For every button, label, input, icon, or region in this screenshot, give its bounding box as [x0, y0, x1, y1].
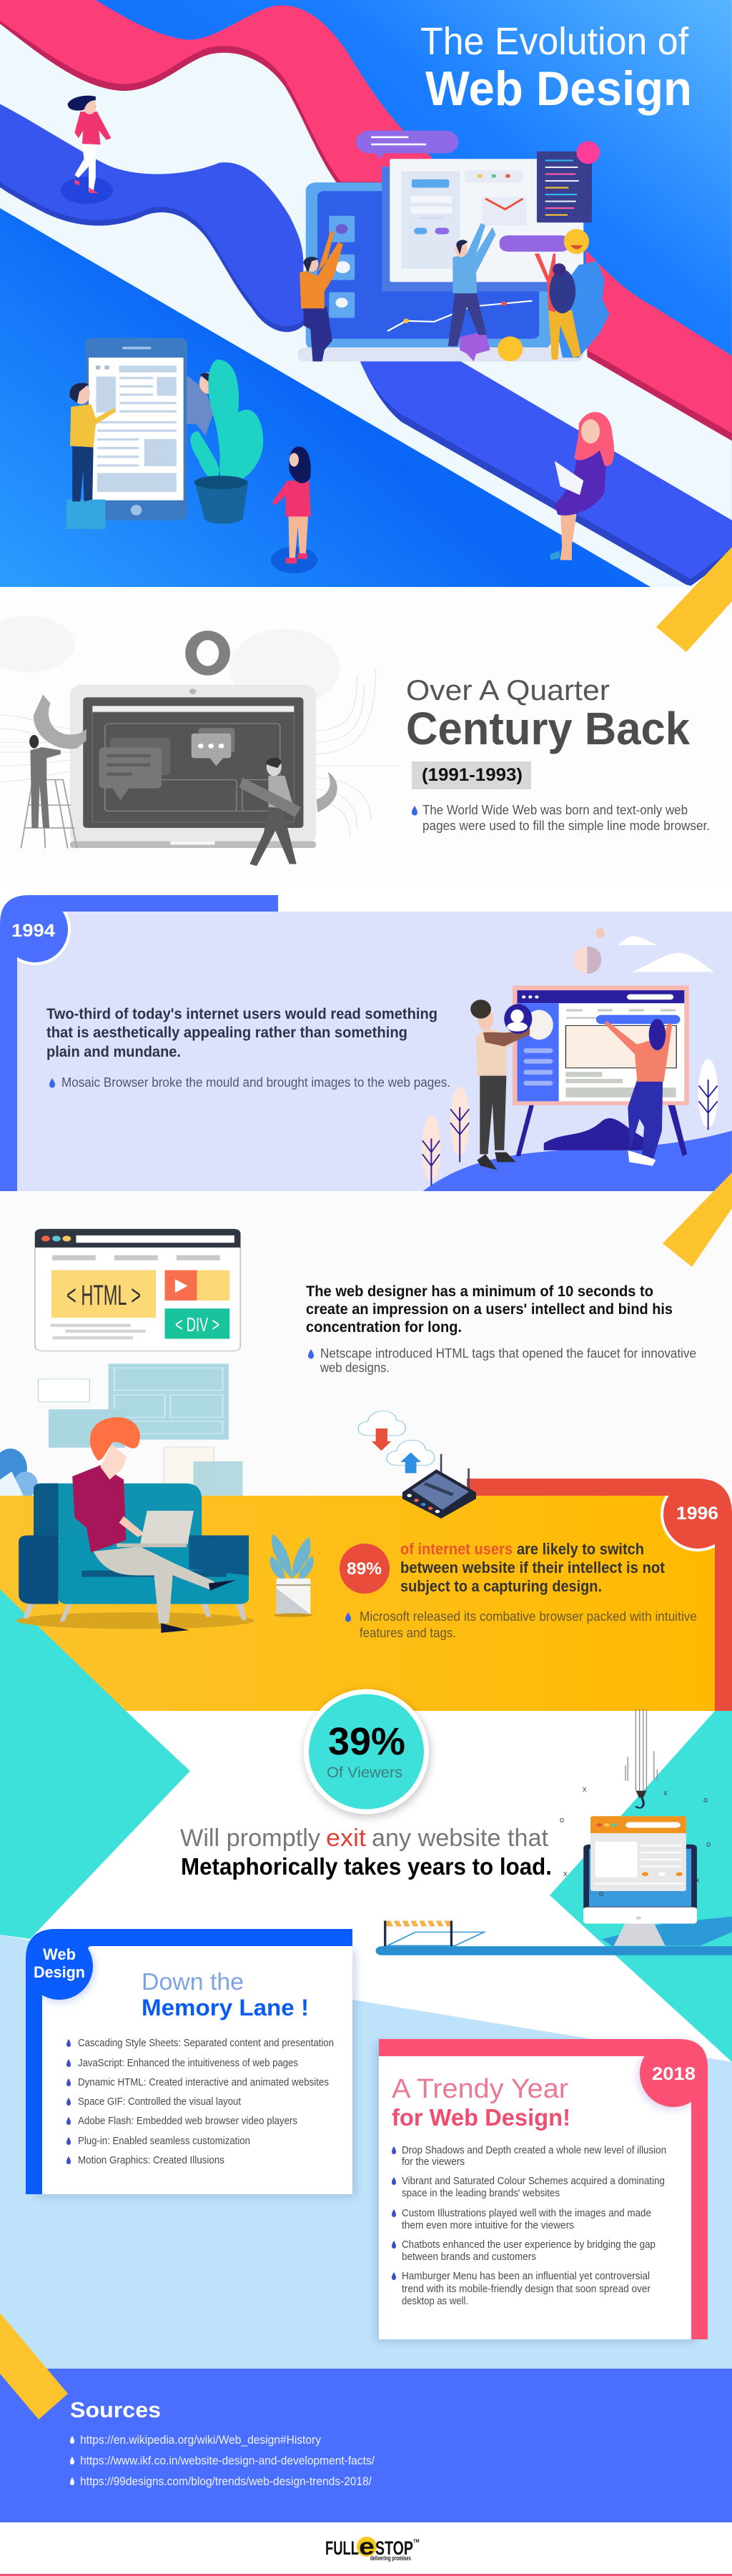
scattered x and o marks: o — [703, 1796, 708, 1805]
text block: html web designer: < DIV > — [175, 1313, 219, 1336]
message: Metaphorically takes years to load. — [181, 1853, 552, 1880]
badge — [26, 1929, 352, 2194]
man — [72, 1417, 236, 1633]
panel: 1996 — [0, 1417, 732, 1712]
html browser and wireframes illustration — [0, 1229, 435, 1497]
statistic badge: 89% — [347, 1559, 382, 1579]
list: Dynamic HTML: Created interactive and animated websites — [78, 2076, 329, 2088]
text block: html web designer: web designs. — [320, 1361, 390, 1375]
badge — [379, 2039, 708, 2339]
list: them even more intuitive for the viewers — [402, 2219, 574, 2231]
trees — [0, 1449, 38, 1497]
text block: features and tags. — [360, 1626, 456, 1640]
heading: Sources — [70, 2397, 161, 2422]
walking woman — [61, 96, 113, 204]
text block: Microsoft released its combative browser packed with intuitive — [360, 1609, 697, 1624]
statistic badge — [340, 1544, 390, 1594]
scattered x and o marks: x — [696, 1876, 700, 1885]
laptop dashboard — [298, 131, 609, 361]
list — [392, 2144, 666, 2307]
left teal shape — [0, 1711, 190, 1939]
plant — [190, 360, 263, 524]
text block: plain and mundane. — [46, 1044, 181, 1060]
year badge: 1996 — [676, 1504, 718, 1524]
date badge — [412, 761, 531, 789]
potted plant — [270, 1534, 314, 1617]
heading: Down the — [142, 1968, 244, 1995]
text block: Two-third of today's internet users would read something — [46, 1006, 437, 1022]
shelf and hurdle — [376, 1921, 732, 1955]
right teal shape — [550, 1711, 732, 2062]
scattered x and o marks — [560, 1785, 711, 1898]
text block: html web designer — [66, 1280, 696, 1375]
clouds and sphere — [573, 928, 714, 974]
list: Drop Shadows and Depth created a whole new level of illusion — [402, 2144, 666, 2156]
links: https://99designs.com/blog/trends/web-design-trends-2018/ — [80, 2474, 372, 2488]
browser board illustration — [422, 928, 732, 1191]
footer logo — [325, 2533, 420, 2562]
list: Vibrant and Saturated Colour Schemes acquired a dominating — [402, 2175, 665, 2187]
scattered x and o marks: o — [560, 1816, 564, 1825]
text block — [46, 1006, 450, 1090]
list: trend with its mobile-friendly design that soon spread over — [402, 2283, 651, 2295]
footer logo: delivering promises — [370, 2555, 411, 2562]
title: Web Design — [425, 61, 692, 116]
seated woman — [550, 412, 614, 560]
cloud upload download — [358, 1411, 435, 1474]
links: https://en.wikipedia.org/wiki/Web_design#History — [80, 2433, 321, 2447]
footer logo: e — [359, 2533, 375, 2560]
message: Will promptly — [180, 1825, 320, 1852]
title: The Evolution of — [420, 20, 689, 63]
links — [70, 2433, 375, 2488]
text block: between website if their intellect is not — [400, 1559, 666, 1576]
message: exit — [326, 1825, 367, 1852]
text block: html web designer: < HTML > — [66, 1280, 141, 1311]
text block: html web designer: Netscape introduced HTML tags that opened the faucet for innovative — [320, 1346, 696, 1361]
links: https://www.ikf.co.in/website-design-and-development-facts/ — [80, 2454, 375, 2467]
man with avatar — [470, 1000, 532, 1170]
badge: 2018 — [652, 2064, 696, 2084]
text block: of internet users — [400, 1540, 513, 1558]
text block: that is aesthetically appealing rather than something — [46, 1025, 407, 1041]
wifi router — [402, 1454, 476, 1519]
list: for the viewers — [402, 2156, 465, 2168]
woman pointing — [605, 1019, 672, 1166]
panel: html web designer — [0, 1173, 732, 1497]
statistic circle: 39% — [328, 1720, 405, 1763]
card: down the memory lane — [26, 1929, 356, 2197]
list: Space GIF: Controlled the visual layout — [78, 2096, 242, 2108]
year badge: 1994 — [11, 921, 55, 941]
phone with people — [66, 338, 216, 529]
panel: 39 percent of viewers — [0, 1692, 732, 2369]
list: space in the leading brands' websites — [402, 2187, 560, 2199]
badge: Design — [34, 1963, 85, 1981]
text block: html web designer: The web designer has a minimum of 10 seconds to — [306, 1283, 653, 1300]
panel: hero — [0, 0, 732, 587]
text block — [345, 1540, 697, 1640]
chat bubbles — [99, 728, 234, 800]
title — [420, 20, 692, 116]
badge: Web — [43, 1945, 76, 1963]
heading: Over A Quarter — [406, 675, 610, 706]
panel: over a quarter century back — [0, 547, 732, 887]
red top woman — [535, 254, 581, 360]
man on ladder — [21, 735, 77, 849]
orange shirt man — [300, 231, 343, 361]
heading — [142, 1968, 309, 2020]
message: any website that — [372, 1825, 549, 1852]
scattered x and o marks: x — [663, 1789, 668, 1797]
loading window illustration — [376, 1709, 732, 1955]
standing woman — [271, 447, 317, 573]
text block: pages were used to fill the simple line mode browser. — [422, 819, 710, 833]
date badge: (1991-1993) — [422, 765, 523, 785]
list: Chatbots enhanced the user experience by bridging the gap — [402, 2239, 656, 2251]
list — [66, 2037, 334, 2166]
scattered x and o marks: o — [599, 1890, 603, 1898]
light blue background — [0, 1935, 732, 2369]
statistic circle — [305, 1692, 430, 1817]
year badge — [467, 1479, 732, 1711]
text block: subject to a capturing design. — [400, 1577, 602, 1595]
footer logo: FULL — [325, 2537, 359, 2559]
list: Plug-in: Enabled seamless customization — [78, 2135, 250, 2147]
heading: A Trendy Year — [392, 2074, 568, 2104]
list: desktop as well. — [402, 2295, 468, 2307]
scattered x and o marks: o — [706, 1840, 711, 1849]
scattered x and o marks: x — [583, 1785, 587, 1794]
list: Cascading Style Sheets: Separated content and presentation — [78, 2037, 334, 2049]
blue shirt man — [448, 223, 495, 346]
list: between brands and customers — [402, 2251, 536, 2263]
list: Custom Illustrations played well with the images and made — [402, 2207, 651, 2219]
list: Motion Graphics: Created Illusions — [78, 2154, 224, 2166]
list: JavaScript: Enhanced the intuitiveness of web pages — [78, 2057, 298, 2069]
statistic circle: Of Viewers — [327, 1765, 402, 1781]
yellow accent strip — [656, 547, 732, 652]
heading: for Web Design! — [392, 2104, 570, 2131]
heading: Century Back — [406, 703, 690, 754]
walking man — [239, 757, 301, 866]
yellow accent strip — [663, 1173, 732, 1267]
yellow accent strip — [0, 2313, 68, 2419]
text block — [412, 803, 710, 833]
year badge — [0, 895, 278, 1193]
footer logo: TM — [413, 2540, 420, 2544]
man on sofa illustration — [16, 1417, 476, 1633]
heading — [392, 2074, 570, 2131]
trees — [422, 1059, 718, 1185]
list: Adobe Flash: Embedded web browser video players — [78, 2115, 297, 2127]
panel: 1994 — [0, 895, 732, 1193]
panel: sources — [0, 2313, 732, 2522]
heading: Memory Lane ! — [142, 1995, 309, 2020]
list: Hamburger Menu has been an influential yet controversial — [402, 2270, 650, 2282]
scattered x and o marks: x — [563, 1870, 568, 1878]
text block: are likely to switch — [517, 1540, 644, 1558]
text block: The World Wide Web was born and text-only web — [422, 803, 688, 817]
message — [180, 1825, 552, 1880]
hero artwork — [0, 0, 732, 587]
grey laptop illustration — [0, 616, 402, 866]
card: a trendy year — [375, 2039, 708, 2342]
text block: html web designer: create an impression on a users' intellect and bind his — [306, 1301, 673, 1318]
heading — [406, 675, 690, 754]
footer bottom stripe — [0, 2574, 732, 2576]
footer logo: STOP — [375, 2537, 413, 2559]
text block: html web designer: concentration for long. — [306, 1319, 462, 1336]
text block: Mosaic Browser broke the mould and brought images to the web pages. — [61, 1075, 450, 1090]
left teal shape — [0, 1589, 126, 1712]
